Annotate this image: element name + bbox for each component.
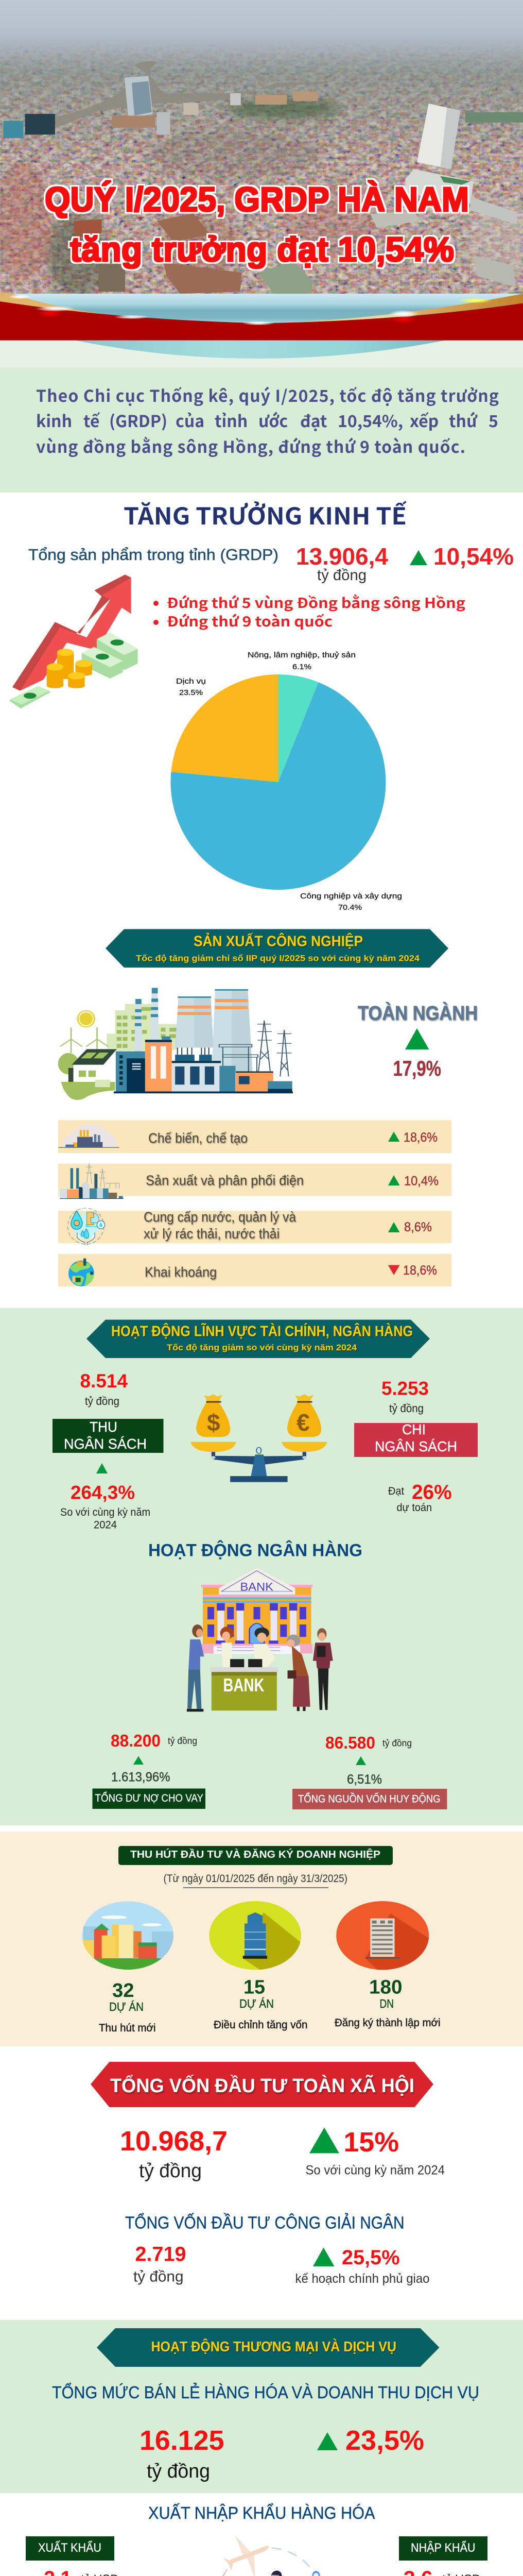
heading: public investment disbursement: TỔNG VỐN ĐẦU TƯ CÔNG GIẢI NGÂN — [125, 2212, 405, 2232]
value — [388, 1174, 439, 1188]
banner: industrial production: SẢN XUẤT CÔNG NGHIỆP — [194, 933, 363, 950]
heading box: THU HÚT ĐẦU TƯ VÀ ĐĂNG KÝ DOANH NGHIỆP — [130, 1848, 380, 1860]
stat: capital increases: Điều chỉnh tăng vốn — [214, 2019, 308, 2031]
banner: total social investment — [91, 2062, 433, 2107]
stat: new projects: Thu hút mới — [99, 2022, 155, 2034]
label: Sản xuất và phân phối điện — [146, 1173, 304, 1188]
stat: retail revenue: tỷ đồng — [147, 2461, 210, 2482]
title: main headline: tăng trưởng đạt 10,54% — [70, 230, 454, 269]
heading: banking: HOẠT ĐỘNG NGÂN HÀNG — [148, 1540, 362, 1560]
label: xử lý rác thải, nước thải — [144, 1226, 280, 1242]
icon: factory — [58, 1124, 119, 1148]
stat: total deposits — [292, 1733, 447, 1809]
panel: finance and banking — [0, 1308, 523, 1825]
stat: total social investment: 10.968,7 — [120, 2126, 228, 2157]
budget expenditure: 5.253 — [381, 1378, 429, 1399]
budget expenditure: Đạt — [388, 1485, 404, 1497]
intro paragraph: kinh — [36, 409, 72, 432]
illustration: factory with green energy — [58, 988, 293, 1100]
stat: capital increases — [214, 1976, 308, 2031]
panel: intro summary — [0, 368, 523, 493]
GRDP value: 13.906,4 — [296, 543, 388, 570]
value — [388, 1263, 437, 1278]
row: manufacturing — [58, 1120, 451, 1153]
pie chart: GRDP structure — [170, 651, 402, 912]
stat: total loans — [93, 1731, 205, 1809]
banner: industrial production — [106, 929, 448, 968]
budget revenue: THU — [90, 1419, 117, 1435]
bullet list: rankings: Đứng thứ 9 toàn quốc — [167, 611, 333, 631]
icon: blue tower circle — [209, 1901, 302, 1971]
icon: water drops and hands — [68, 1208, 105, 1245]
stat: public investment disbursement: tỷ đồng — [133, 2268, 183, 2285]
intro paragraph: đạt — [300, 409, 327, 432]
stat: total loans: 88.200 — [111, 1731, 161, 1750]
budget expenditure: dự toán — [396, 1502, 432, 1514]
GRDP label: Tổng sản phẩm trong tỉnh (GRDP) — [28, 546, 278, 564]
value — [388, 1130, 438, 1145]
stat: exports — [26, 2536, 119, 2576]
title: main headline: QUÝ I/2025, GRDP HÀ NAM — [45, 180, 469, 219]
date range: (Từ ngày 01/01/2025 đến ngày 31/3/2025) — [164, 1873, 347, 1885]
icon: globe with industry — [68, 1259, 94, 1286]
label: agriculture share — [248, 651, 356, 671]
label: Chế biến, chế tạo — [148, 1130, 248, 1146]
banner: trade and services — [97, 2328, 440, 2367]
intro paragraph: vùng đồng bằng sông Hồng, đứng thứ 9 toàn quốc. — [36, 434, 465, 458]
intro paragraph: 10,54%, — [338, 409, 403, 432]
stat: new businesses: DN — [380, 1997, 394, 2010]
banner: trade and services: HOẠT ĐỘNG THƯƠNG MẠI VÀ DỊCH VỤ — [151, 2338, 396, 2354]
budget expenditure: 26% — [412, 1481, 452, 1503]
callout: whole-sector industrial growth: TOÀN NGÀNH — [358, 1002, 478, 1024]
callout: whole-sector industrial growth — [358, 1002, 478, 1080]
illustration: bank building and staff: BANK — [223, 1674, 265, 1696]
banner: finance and banking — [86, 1320, 430, 1358]
panel: investment attraction and business registration — [0, 1832, 523, 2046]
title: main headline — [45, 180, 469, 269]
value: 18,6% — [403, 1263, 437, 1278]
banner: finance and banking: Tốc độ tăng giảm so với cùng kỳ năm 2024 — [167, 1343, 357, 1352]
illustration: bank building and staff: BANK — [240, 1581, 273, 1593]
stat: total deposits: TỔNG NGUỒN VỐN HUY ĐỘNG — [298, 1793, 441, 1805]
row: electricity — [58, 1163, 451, 1199]
stat: total social investment: tỷ đồng — [139, 2160, 202, 2182]
stat: new businesses: 180 — [369, 1976, 403, 1998]
budget expenditure: NGÂN SÁCH — [375, 1438, 457, 1454]
row: water and waste — [58, 1208, 451, 1245]
icon: power plant — [60, 1163, 124, 1199]
heading: economic growth: TĂNG TRƯỞNG KINH TẾ — [124, 498, 407, 531]
stat: total deposits: 86.580 — [325, 1733, 375, 1752]
stat: total social investment: 15% — [344, 2127, 399, 2158]
row: mining — [58, 1254, 451, 1286]
GRDP unit: tỷ đồng — [317, 567, 367, 584]
intro paragraph: tỉnh — [215, 409, 248, 432]
stat: total deposits: tỷ đồng — [382, 1738, 412, 1749]
value — [388, 1220, 432, 1234]
banner: total social investment: TỔNG VỐN ĐẦU TƯ TOÀN XÃ HỘI — [110, 2074, 414, 2097]
value: 10,4% — [404, 1174, 439, 1188]
intro paragraph: (GRDP) — [109, 409, 167, 432]
label: industry share: 70.4% — [338, 903, 362, 912]
budget revenue: 264,3% — [71, 1482, 135, 1503]
callout: whole-sector industrial growth: 17,9% — [393, 1056, 441, 1080]
stat: public investment disbursement — [133, 2243, 429, 2286]
stat: capital increases: 15 — [243, 1976, 265, 1998]
icon: up triangle — [410, 550, 427, 565]
icon: balance scale with money bags: $ — [207, 1409, 220, 1436]
stat: new businesses — [335, 1976, 441, 2029]
intro paragraph: Theo Chi cục Thống kê, quý I/2025, tốc độ tăng trưởng — [36, 383, 499, 407]
label: agriculture share: 6.1% — [292, 663, 311, 671]
stat: new projects: 32 — [112, 1980, 134, 2002]
budget revenue: 8.514 — [80, 1370, 128, 1392]
header photo: aerial view of the city — [0, 0, 523, 297]
stat: total loans: 1.613,96% — [111, 1770, 170, 1785]
label: services share: Dịch vụ — [176, 677, 206, 686]
GRDP growth rate: 10,54% — [433, 543, 514, 570]
stat: retail revenue: 23,5% — [345, 2425, 424, 2456]
stat: new projects: DỰ ÁN — [109, 2000, 144, 2013]
icon: office tower circle — [336, 1901, 430, 1971]
stat: total social investment — [120, 2126, 445, 2182]
stat: public investment disbursement: 2.719 — [135, 2243, 186, 2266]
intro paragraph: xếp — [410, 409, 439, 432]
budget revenue — [53, 1370, 164, 1531]
budget expenditure — [354, 1378, 478, 1514]
heading box — [118, 1846, 393, 1865]
icon: city circle — [82, 1901, 174, 1971]
bullet list: rankings — [153, 592, 465, 631]
budget expenditure: tỷ đồng — [389, 1402, 424, 1415]
intro paragraph: thứ — [449, 409, 478, 432]
stat: public investment disbursement: kế hoạch chính phủ giao — [295, 2272, 429, 2286]
budget revenue: So với cùng kỳ năm — [60, 1506, 150, 1518]
intro paragraph: ước — [258, 409, 288, 432]
stat: public investment disbursement: 25,5% — [342, 2246, 399, 2269]
stat: retail revenue — [140, 2425, 424, 2482]
label: Cung cấp nước, quản lý và — [144, 1209, 297, 1225]
intro paragraph: tế — [83, 409, 100, 432]
stat: capital increases: DỰ ÁN — [239, 1997, 274, 2010]
label — [144, 1209, 297, 1242]
illustration: bank building and staff — [187, 1568, 333, 1711]
budget revenue: NGÂN SÁCH — [64, 1436, 147, 1452]
value: 18,6% — [404, 1130, 438, 1145]
stat: retail revenue: 16.125 — [140, 2425, 224, 2456]
label: Khai khoáng — [145, 1264, 217, 1280]
panel: trade and services — [0, 2320, 523, 2493]
icon: balance scale with money bags: € — [297, 1409, 310, 1436]
stat: imports — [399, 2536, 487, 2576]
intro paragraph: của — [176, 409, 204, 432]
banner: industrial production: Tốc độ tăng giảm chỉ số IIP quý I/2025 so với cùng kỳ năm 2024 — [136, 953, 420, 963]
stat: exports: XUẤT KHẨU — [38, 2540, 101, 2555]
banner: finance and banking: HOẠT ĐỘNG LĨNH VỰC TÀI CHÍNH, NGÂN HÀNG — [111, 1322, 413, 1340]
stat: total loans: TỔNG DƯ NỢ CHO VAY — [95, 1792, 203, 1804]
budget expenditure: CHI — [402, 1421, 426, 1437]
label: services share: 23.5% — [179, 688, 203, 697]
label: agriculture share: Nông, lâm nghiệp, thuỷ sản — [248, 651, 356, 659]
stat: new businesses: Đăng ký thành lập mới — [335, 2017, 441, 2029]
label: industry share: Công nghiệp và xây dựng — [300, 892, 402, 901]
stat: total deposits: 6,51% — [347, 1772, 382, 1787]
heading: import and export: XUẤT NHẬP KHẨU HÀNG HÓA — [148, 2503, 375, 2522]
ribbon: red and gold banner under the photo — [0, 294, 523, 368]
stat: total loans: tỷ đồng — [168, 1736, 197, 1746]
intro paragraph: 5 — [489, 409, 498, 432]
illustration: logistics man with plane, truck and containers — [193, 2535, 339, 2576]
value: 8,6% — [404, 1220, 432, 1234]
label: services share — [176, 677, 206, 697]
icon: rising arrow with coins and cash — [9, 574, 138, 708]
label: industry share — [300, 892, 402, 912]
icon: balance scale with money bags — [190, 1394, 327, 1482]
bullet list: rankings: Đứng thứ 5 vùng Đồng bằng sông Hồng — [167, 592, 465, 612]
stat: new projects — [99, 1980, 155, 2034]
stat: total social investment: So với cùng kỳ năm 2024 — [306, 2163, 445, 2177]
budget revenue: 2024 — [94, 1519, 117, 1531]
budget revenue: tỷ đồng — [85, 1395, 119, 1408]
heading: retail and services revenue: TỔNG MỨC BÁN LẺ HÀNG HÓA VÀ DOANH THU DỊCH VỤ — [52, 2383, 479, 2402]
intro paragraph — [36, 383, 499, 458]
stat: imports: NHẬP KHẨU — [411, 2540, 476, 2555]
